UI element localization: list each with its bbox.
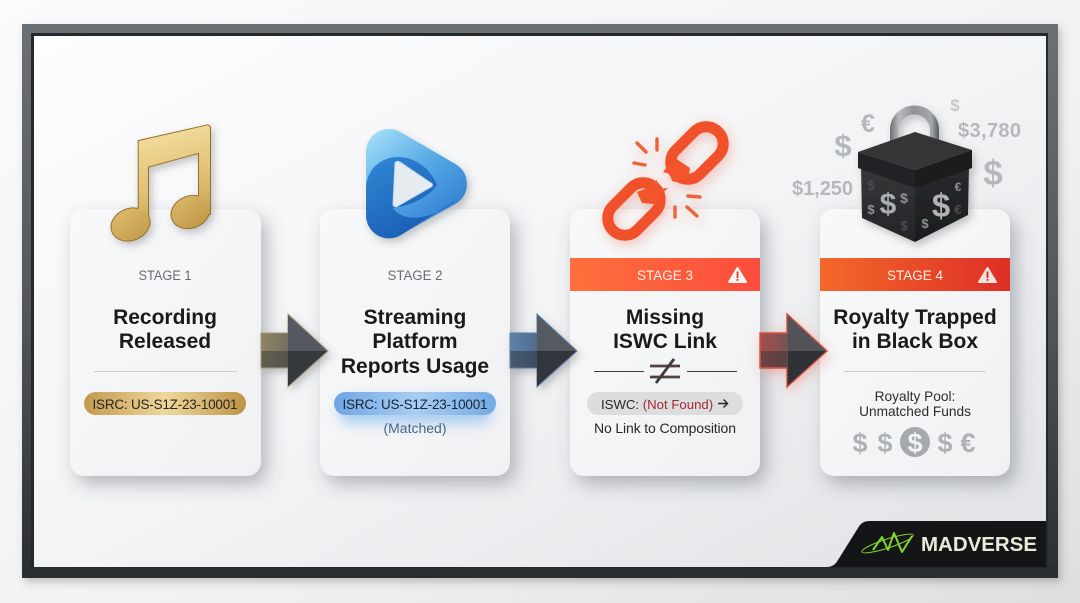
floating money labels: $	[834, 128, 852, 163]
sparks	[634, 139, 700, 217]
royalty pool text: Royalty Pool:	[875, 389, 955, 404]
arrow: stage 2 to stage 3	[510, 314, 577, 387]
dollar marks on box: €	[954, 202, 962, 217]
stage label: STAGE 1	[138, 268, 192, 283]
heading: ISWC Link	[613, 330, 717, 353]
icon: madverse wave	[860, 531, 915, 556]
divider	[844, 371, 986, 372]
icon row: currency symbols	[852, 427, 976, 458]
heading: Recording	[113, 306, 217, 329]
dollar marks on box: $	[921, 216, 929, 231]
heading: Reports Usage	[341, 355, 489, 378]
lid left side	[858, 152, 915, 188]
panel: stage 4	[820, 209, 1010, 476]
note: No Link to Composition	[594, 420, 736, 436]
divider	[94, 371, 237, 372]
heading: Royalty Trapped	[833, 306, 997, 329]
box body left face	[861, 165, 915, 242]
floating money labels: $	[983, 154, 1003, 193]
icon row: currency symbols: $	[877, 428, 893, 458]
box body right face	[915, 165, 969, 242]
dollar marks on box: €	[955, 180, 962, 194]
icon row: currency symbols: $	[907, 428, 923, 458]
heading: Released	[119, 330, 211, 353]
ISRC pill: ISRC: US-S1Z-23-10001	[92, 397, 238, 412]
upper jagged end	[663, 158, 690, 182]
icon: music note	[107, 125, 214, 246]
icon row: currency symbols: €	[960, 428, 976, 458]
lower jagged end	[637, 180, 668, 204]
ISRC pill glow and pill: ISRC: US-S1Z-23-10001	[342, 397, 488, 412]
ISRC pill	[84, 392, 246, 415]
matched note: (Matched)	[383, 420, 447, 436]
arrow: stage 1 to stage 2	[261, 314, 328, 387]
icon row: currency symbols: $	[937, 428, 953, 458]
lid right side	[915, 150, 972, 188]
alert band	[820, 258, 1010, 291]
panel: stage 2	[320, 152, 510, 476]
dollar marks on box: $	[880, 188, 897, 221]
ISRC pill glow and pill	[334, 392, 496, 424]
dollar marks on box: $	[932, 187, 950, 224]
floating money labels: $3,780	[958, 120, 1021, 142]
lower link	[601, 176, 667, 242]
upper link	[664, 120, 730, 186]
ISWC pill: ISWC: (Not Found)	[601, 397, 713, 412]
royalty pool text: Unmatched Funds	[859, 404, 971, 419]
heading: Platform	[372, 330, 458, 353]
box lid	[858, 132, 972, 170]
dollar marks on box: $	[867, 178, 875, 193]
dollar marks on box	[867, 178, 962, 233]
dollar marks on box: $	[867, 202, 875, 217]
icon: broken chain	[601, 120, 730, 242]
dollar marks on box: $	[900, 190, 908, 206]
floating money labels	[792, 96, 1021, 200]
icon row: currency symbols: $	[852, 428, 868, 458]
panel: stage 1	[70, 125, 261, 476]
alert band: STAGE 4	[887, 268, 943, 283]
floating money labels: $	[950, 96, 960, 115]
heading: in Black Box	[852, 330, 978, 353]
dollar marks on box: $	[900, 218, 908, 233]
not-equal divider	[594, 359, 737, 383]
ISWC pill	[587, 392, 743, 415]
stage label: STAGE 2	[388, 268, 442, 283]
floating money labels: $1,250	[792, 178, 853, 200]
icon: warning	[729, 268, 746, 282]
wordmark: MADVERSE	[921, 533, 1037, 556]
heading: Streaming	[364, 306, 466, 329]
logo tab	[826, 521, 1046, 567]
padlock shackle	[894, 110, 934, 156]
alert band: STAGE 3	[637, 268, 693, 283]
alert band	[570, 258, 760, 291]
floating money labels: €	[861, 110, 875, 138]
icon: play button	[366, 152, 456, 238]
heading: Missing	[626, 306, 704, 329]
icon: black box with padlock	[858, 110, 972, 242]
arrow: stage 3 to stage 4	[760, 314, 827, 387]
panel: stage 3	[570, 120, 760, 476]
icon: warning	[979, 268, 996, 282]
